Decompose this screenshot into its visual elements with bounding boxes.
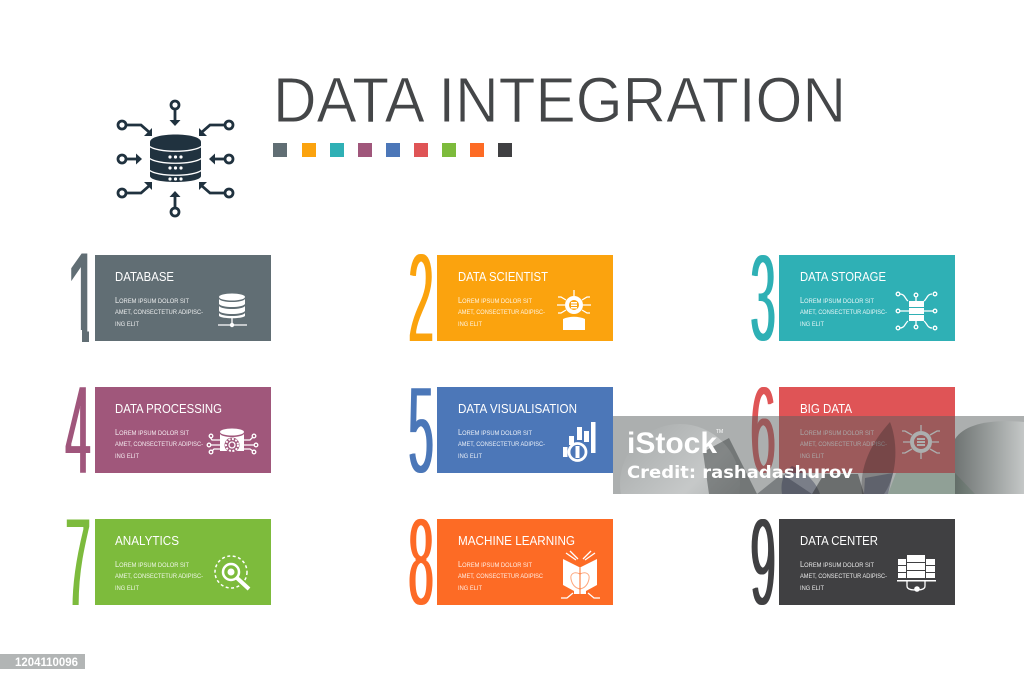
panel: 7 analytics: ING ELIT: [115, 585, 139, 592]
image id tag: 1204110096: [15, 657, 78, 669]
panel: 7 analytics: AMET, CONSECTETUR ADIPISC-: [115, 573, 203, 580]
icon: server racks: [897, 555, 936, 592]
panel: 2 data scientist: LOREM IPSUM DOLOR SIT: [458, 295, 532, 305]
panel: 9 data center: LOREM IPSUM DOLOR SIT: [800, 559, 874, 569]
panel: 8 machine learning: LOREM IPSUM DOLOR SIT: [458, 559, 532, 569]
panel: 5 data visualisation: DATA VISUALISATION: [458, 401, 577, 416]
numeral 7: 7: [65, 493, 91, 634]
icon: scientist: [557, 290, 591, 330]
watermark logo: iStock: [627, 427, 717, 460]
panel: 4 data processing: DATA PROCESSING: [115, 401, 222, 416]
numeral 9: 9: [750, 493, 776, 632]
panel: 9 data center: AMET, CONSECTETUR ADIPISC-: [800, 573, 887, 580]
panel: 2 data scientist: [408, 229, 613, 370]
panel: 6 big data: BIG DATA: [800, 401, 852, 416]
panel: 3 data storage: DATA STORAGE: [800, 269, 886, 284]
watermark trademark: TM: [716, 429, 723, 435]
numeral 4: 4: [65, 361, 91, 502]
panel: 8 machine learning: MACHINE LEARNING: [458, 533, 575, 548]
colour swatch row: [273, 143, 512, 157]
panel: 9 data center: ING ELIT: [800, 585, 824, 592]
numeral 2: 2: [408, 229, 434, 370]
icon: storage network: [896, 292, 937, 330]
numeral 1: 1: [66, 229, 100, 370]
icon: database integration: [118, 101, 233, 216]
panel: 8 machine learning: ING ELIT: [458, 585, 482, 592]
title: DATA INTEGRATION: [273, 64, 846, 136]
numeral 6: 6: [750, 361, 776, 500]
panel: 4 data processing: ING ELIT: [115, 453, 139, 460]
watermark band: [613, 416, 1024, 494]
panel: 3 data storage: [750, 229, 955, 368]
icon: database network: [218, 294, 247, 327]
watermark credit: Credit: rashadashurov: [627, 463, 853, 483]
panel: 5 data visualisation: [408, 361, 613, 500]
panel: 2 data scientist: DATA SCIENTIST: [458, 269, 548, 284]
panel: 9 data center: [750, 493, 955, 632]
panel: 7 analytics: LOREM IPSUM DOLOR SIT: [115, 559, 189, 569]
panel: 9 data center: DATA CENTER: [800, 533, 878, 548]
panel: 6 big data: LOREM IPSUM DOLOR SIT: [800, 427, 874, 437]
panel: 6 big data: AMET, CONSECTETUR ADIPISC-: [800, 441, 887, 448]
panel: 1 database: DATABASE: [115, 269, 174, 284]
panel: 5 data visualisation: LOREM IPSUM DOLOR SIT: [458, 427, 532, 437]
panel: 8 machine learning: [408, 493, 613, 632]
panel: 1 database: AMET, CONSECTETUR ADIPISC-: [115, 309, 203, 316]
panel: 5 data visualisation: AMET, CONSECTETUR ADIPISC-: [458, 441, 545, 448]
panel: 1 database: [71, 254, 271, 342]
icon: big data gear: [902, 425, 940, 459]
numeral 3: 3: [750, 229, 776, 368]
panel: 3 data storage: ING ELIT: [800, 321, 824, 328]
icon: book and brain: [561, 551, 600, 598]
panel: 7 analytics: ANALYTICS: [115, 533, 179, 548]
numeral 5: 5: [408, 361, 434, 500]
icon: chart with lens: [563, 422, 596, 460]
numeral 8: 8: [408, 493, 434, 632]
image id tag: [0, 654, 85, 669]
panel: 2 data scientist: AMET, CONSECTETUR ADIPISC-: [458, 309, 545, 316]
panel: 1 database: ING ELIT: [115, 321, 139, 328]
panel: 6 big data: [750, 361, 955, 500]
icon: magnifier target: [215, 556, 249, 589]
panel: 6 big data: ING ELIT: [800, 453, 824, 460]
panel: 2 data scientist: ING ELIT: [458, 321, 482, 328]
panel: 4 data processing: LOREM IPSUM DOLOR SIT: [115, 427, 189, 437]
icon: gear database: [207, 428, 258, 454]
panel: 8 machine learning: AMET, CONSECTETUR ADIPISC: [458, 573, 543, 580]
panel: 4 data processing: [65, 361, 271, 502]
panel: 7 analytics: [65, 493, 271, 634]
panel: 1 database: LOREM IPSUM DOLOR SIT: [115, 295, 189, 305]
panel: 3 data storage: AMET, CONSECTETUR ADIPISC-: [800, 309, 887, 316]
panel: 4 data processing: AMET, CONSECTETUR ADIPISC-: [115, 441, 203, 448]
panel: 3 data storage: LOREM IPSUM DOLOR SIT: [800, 295, 874, 305]
panel: 5 data visualisation: ING ELIT: [458, 453, 482, 460]
